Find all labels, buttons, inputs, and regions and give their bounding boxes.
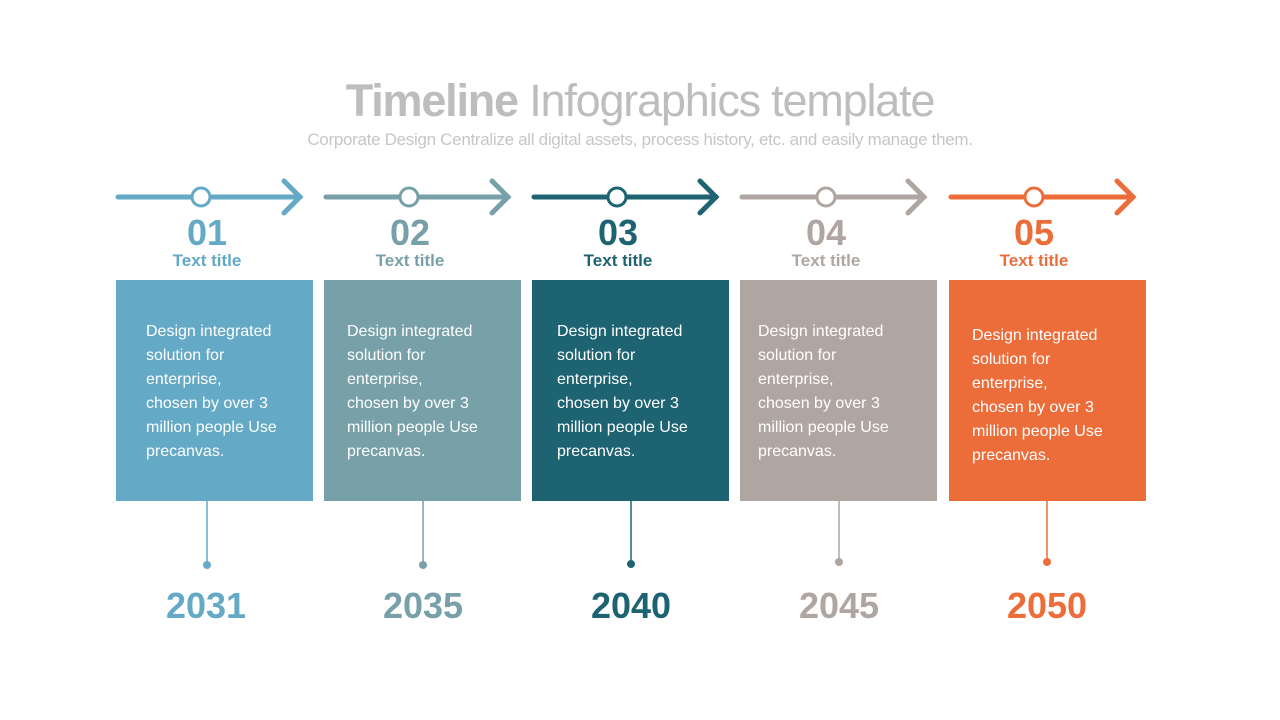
box 5: enterprise, (972, 375, 1048, 392)
box 2: enterprise, (347, 371, 423, 388)
box 5: precanvas. (972, 447, 1050, 464)
connectors (203, 501, 1051, 569)
arrow 5 (951, 181, 1133, 213)
box 1: precanvas. (146, 443, 224, 460)
box 1 (116, 280, 313, 501)
box 3: enterprise, (557, 371, 633, 388)
title: Timeline Infographics template (346, 75, 934, 126)
text: 2035 (383, 585, 463, 626)
box 3: million people Use (557, 419, 688, 436)
box 4: chosen by over 3 (758, 395, 880, 412)
box 5: Design integrated (972, 327, 1097, 344)
box 4: enterprise, (758, 371, 834, 388)
text: 03 (598, 212, 638, 253)
text: Text title (1000, 251, 1068, 270)
box 3: chosen by over 3 (557, 395, 679, 412)
box 4: Design integrated (758, 323, 883, 340)
titles: Text title (173, 251, 241, 270)
text: 2040 (591, 585, 671, 626)
box 2: million people Use (347, 419, 478, 436)
box 3: solution for (557, 347, 635, 364)
years: 2031 (166, 585, 246, 626)
box 1: Design integrated (146, 323, 271, 340)
box 5 (949, 280, 1146, 501)
box 3 (532, 280, 729, 501)
box 2: precanvas. (347, 443, 425, 460)
box 1: solution for (146, 347, 224, 364)
box 2: Design integrated (347, 323, 472, 340)
box 1: chosen by over 3 (146, 395, 268, 412)
box 4 (740, 280, 937, 501)
box 4: solution for (758, 347, 836, 364)
box 5: chosen by over 3 (972, 399, 1094, 416)
text: 05 (1014, 212, 1054, 253)
text: Text title (584, 251, 652, 270)
box 2 (324, 280, 521, 501)
box 4: precanvas. (758, 443, 836, 460)
box 1: enterprise, (146, 371, 222, 388)
box 3: precanvas. (557, 443, 635, 460)
box 5: solution for (972, 351, 1050, 368)
arrow 4 (742, 181, 924, 213)
subtitle: Corporate Design Centralize all digital assets, process history, etc. and easily manage them. (307, 130, 973, 149)
box 2: chosen by over 3 (347, 395, 469, 412)
box 5: million people Use (972, 423, 1103, 440)
arrow 1 (118, 181, 300, 213)
box 2: solution for (347, 347, 425, 364)
text: 02 (390, 212, 430, 253)
text: 2050 (1007, 585, 1087, 626)
text: 04 (806, 212, 846, 253)
text: Text title (376, 251, 444, 270)
text: 2045 (799, 585, 879, 626)
box 1: million people Use (146, 419, 277, 436)
box 4: million people Use (758, 419, 889, 436)
arrow 3 (534, 181, 716, 213)
numbers: 01 (187, 212, 227, 253)
box 3: Design integrated (557, 323, 682, 340)
arrow 2 (326, 181, 508, 213)
text: Text title (792, 251, 860, 270)
